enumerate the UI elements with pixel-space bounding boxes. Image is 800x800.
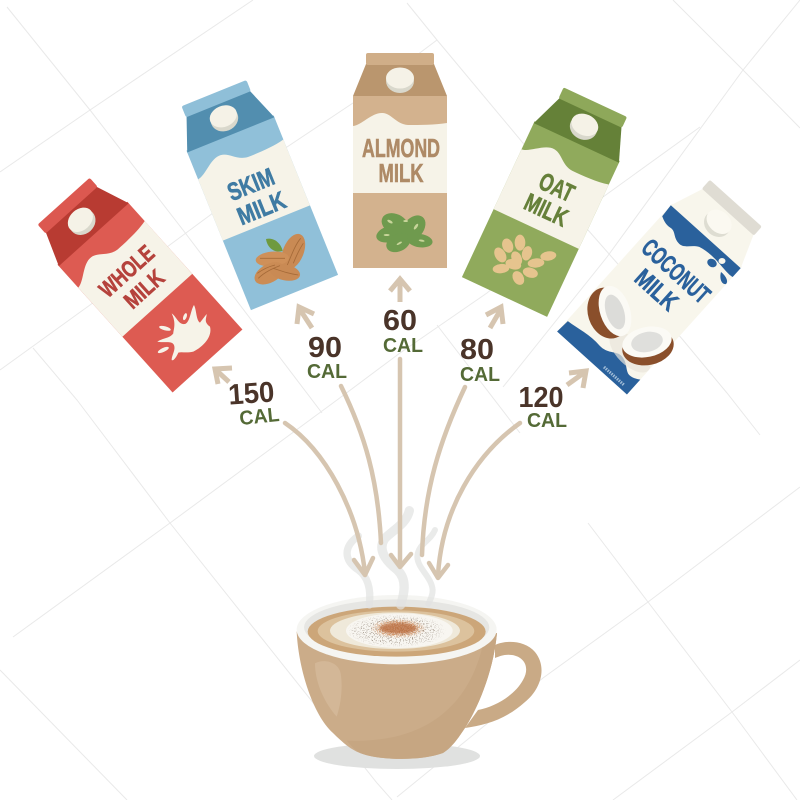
- label: 80 cal: CAL: [460, 364, 500, 386]
- cup rim: [297, 595, 497, 664]
- carton: oat milk: [462, 82, 638, 317]
- carton body: [186, 115, 338, 310]
- arrow: almond milk to cup: [391, 359, 411, 567]
- carton name: [94, 240, 176, 321]
- arrow: up to almond milk: [390, 279, 410, 302]
- label: 60 cal: CAL: [383, 335, 423, 357]
- steam: [347, 511, 435, 605]
- carton name: MILK: [233, 186, 290, 231]
- label: 150 cal: [227, 376, 280, 430]
- carton name: [618, 234, 716, 329]
- cup lower shading: [347, 633, 497, 759]
- carton gable: [671, 180, 763, 268]
- carton name: MILK: [520, 188, 572, 233]
- carton gable: [353, 64, 447, 96]
- carton name: [520, 166, 583, 233]
- cap: [386, 68, 414, 93]
- bottom blue band: [557, 313, 644, 394]
- carton: skim milk: [170, 76, 338, 310]
- label: 80 cal: 80: [460, 334, 494, 366]
- carton name: SKIM: [224, 163, 279, 207]
- carton: coconut milk: [557, 172, 771, 394]
- cinnamon dusting: [347, 614, 447, 647]
- label: 60 cal: [383, 305, 423, 357]
- cup highlight: [315, 661, 342, 717]
- label: 90 cal: CAL: [307, 361, 347, 383]
- carton gable: [534, 92, 633, 163]
- cream label band: [494, 137, 613, 249]
- arrow: skim milk to cup: [341, 386, 381, 543]
- cap: [699, 205, 737, 242]
- arrow: up to whole milk: [215, 368, 232, 384]
- cap: [566, 109, 602, 144]
- cup body: [297, 632, 497, 759]
- carton gable: [175, 86, 274, 152]
- label: 80 cal: [460, 334, 500, 386]
- arrow: up to oat milk: [486, 307, 503, 328]
- coffee surface: [308, 607, 486, 657]
- icon: coconut halves: [581, 282, 677, 380]
- label: 150 cal: 150: [227, 376, 275, 412]
- icon: almonds: [251, 230, 310, 289]
- arrow: up to skim milk: [297, 307, 314, 328]
- cap: [63, 203, 101, 240]
- label: 150 cal: CAL: [238, 404, 280, 430]
- carton body: [462, 121, 620, 317]
- carton name: MILK: [119, 264, 170, 314]
- coffee cup: [297, 595, 497, 759]
- carton name: [362, 133, 440, 188]
- label: 120 cal: CAL: [527, 410, 567, 432]
- carton gable: [36, 178, 129, 266]
- icon: oats: [492, 235, 557, 287]
- cream label band: [193, 131, 310, 241]
- cup shadow: [314, 743, 480, 769]
- label: 60 cal: 60: [383, 305, 417, 337]
- arrow: oat milk to cup: [422, 387, 465, 555]
- carton name: COCONUT: [636, 234, 716, 309]
- icon: milk drops on band: [706, 257, 727, 284]
- arrow: coconut milk to cup: [429, 423, 520, 578]
- carton: whole milk: [29, 170, 242, 392]
- carton body: [57, 202, 242, 392]
- carton body: [353, 96, 447, 268]
- label: 90 cal: [307, 332, 347, 383]
- icon: milk splash: [157, 305, 210, 360]
- carton name: WHOLE: [94, 240, 159, 302]
- carton name: ALMOND: [362, 133, 440, 163]
- cream label band: [353, 113, 447, 193]
- carton body: [557, 204, 742, 394]
- label: 90 cal: 90: [308, 332, 342, 364]
- top blue band: [655, 205, 741, 285]
- carton: almond milk: [353, 53, 447, 268]
- label: 120 cal: [518, 382, 567, 432]
- carton name: MILK: [378, 158, 424, 188]
- arrow: whole milk to cup: [285, 423, 373, 575]
- cream label band: [69, 214, 192, 337]
- cup handle: [465, 642, 542, 728]
- arrow: up to coconut milk: [567, 371, 586, 388]
- carton name: OAT: [534, 167, 579, 208]
- carton name: MILK: [629, 264, 683, 317]
- label: 120 cal: 120: [518, 382, 564, 414]
- icon: green almond pods: [374, 209, 433, 256]
- cap: [206, 101, 242, 135]
- carton name: [224, 162, 290, 231]
